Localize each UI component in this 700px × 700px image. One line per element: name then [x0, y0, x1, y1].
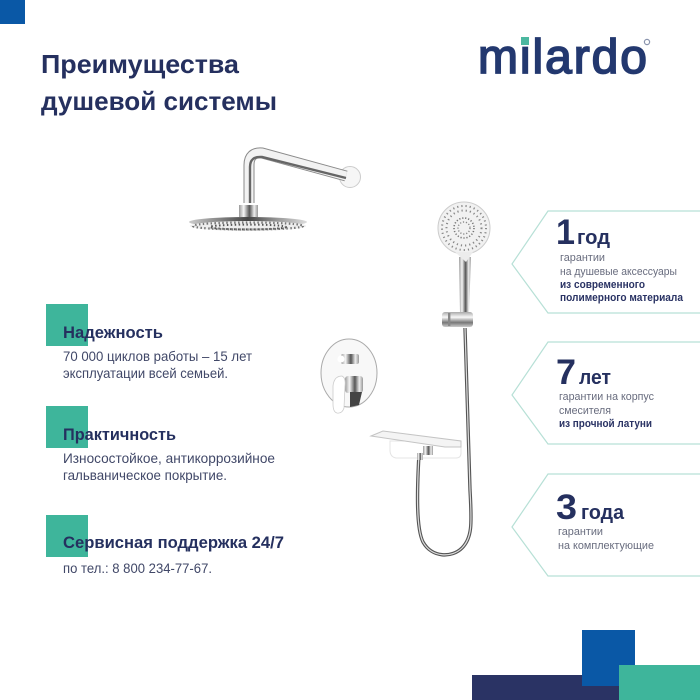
panel: 1 year warranty: на душевые аксессуары	[560, 266, 677, 278]
panel: practicality: гальваническое покрытие.	[63, 467, 227, 483]
panel: 3 years warranty: на комплектующие	[558, 540, 654, 552]
icon: shelf with hose connector	[371, 431, 461, 460]
panel: service support: Сервисная поддержка 24/7	[63, 533, 284, 552]
panel: reliability: эксплуатации всей семьей.	[63, 365, 228, 381]
logo: milardo: milardo	[478, 31, 647, 84]
panel: 7 years warranty: гарантии на корпус	[559, 391, 654, 403]
panel: 3 years warranty: гарантии	[558, 526, 603, 538]
title	[41, 49, 277, 116]
panel: 1 year warranty: год	[577, 227, 610, 249]
panel: 3 years warranty	[512, 474, 700, 576]
panel: service support	[46, 515, 284, 576]
panel: 7 years warranty: лет	[579, 367, 611, 389]
corner blocks bottom right	[472, 630, 700, 700]
panel: practicality	[46, 406, 275, 483]
panel: practicality: Практичность	[63, 425, 176, 444]
panel: 1 year warranty: 1	[556, 213, 575, 252]
icon: hand shower	[438, 202, 490, 327]
panel: 7 years warranty: 7	[556, 353, 576, 392]
panel: 7 years warranty: из прочной латуни	[559, 418, 652, 430]
corner square top left	[0, 0, 25, 24]
panel: 1 year warranty	[512, 211, 700, 313]
panel: service support: по тел.: 8 800 234-77-67.	[63, 560, 212, 576]
title: Преимущества	[41, 49, 240, 79]
panel: 1 year warranty: гарантии	[560, 252, 605, 264]
panel: 1 year warranty: полимерного материала	[560, 292, 684, 304]
panel: 3 years warranty: года	[581, 502, 625, 524]
panel: 7 years warranty	[512, 342, 700, 444]
panel: 1 year warranty: из современного	[560, 279, 645, 291]
title: душевой системы	[41, 86, 277, 116]
panel: reliability	[46, 304, 253, 381]
icon: wall mixer	[321, 339, 377, 413]
panel: reliability: Надежность	[63, 323, 163, 342]
panel: practicality: Износостойкое, антикоррозийное	[63, 450, 275, 466]
panel: 3 years warranty: 3	[556, 488, 577, 527]
panel: reliability: 70 000 циклов работы – 15 лет	[63, 348, 253, 364]
panel: 7 years warranty: смесителя	[559, 405, 611, 417]
icon: shower hose	[418, 328, 471, 555]
icon: rain shower head with wall arm	[189, 153, 360, 231]
